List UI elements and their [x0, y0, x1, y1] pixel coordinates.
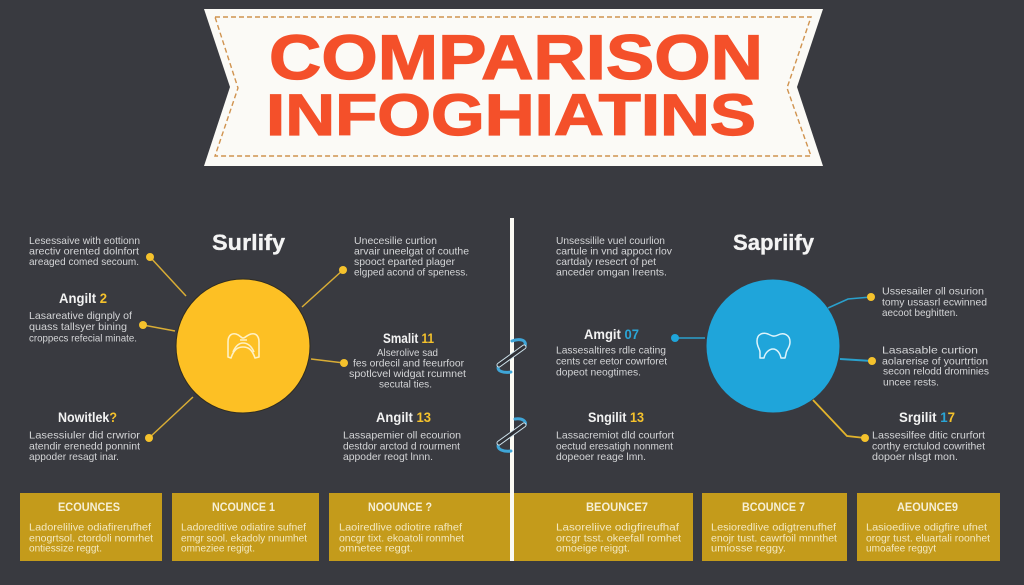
connector: bottom right	[813, 400, 869, 442]
text block: Angilt 13: destdor arctod d rourment	[343, 440, 460, 452]
text block: Angilt 2	[29, 290, 137, 344]
card: NCOUNCE 1: emgr sool. ekadoly nnumhet	[181, 532, 307, 544]
text block: Amgit 07	[556, 326, 667, 378]
text block: Angilt 2: Angilt 2	[59, 290, 107, 306]
yellow circle	[176, 279, 310, 413]
text block: Nowitlek: Nowitlek?	[58, 409, 117, 425]
connector: top right	[828, 293, 875, 308]
card: BCOUNCE 7: Lesioredlive odigtrenufhef	[711, 522, 836, 534]
text block: Amgit 07: Lassesaltires rdle cating	[556, 344, 666, 356]
card: ECOUNCES	[20, 493, 162, 561]
text block: middle right	[882, 344, 989, 388]
text block: top left: Lesessaive with eottionn	[29, 235, 140, 247]
card: AEOUNCE9: orogr tust. eluartali roonhet	[866, 532, 990, 544]
card: NCOUNCE 1	[172, 493, 319, 561]
text block: top right	[354, 235, 469, 278]
text block: Sngilit 13: Lassacremiot dld courfort	[556, 430, 674, 442]
card: NCOUNCE 1: Ladoreditive odiatire sufnef	[181, 522, 306, 534]
card: BCOUNCE 7: umiosse reggy.	[711, 542, 786, 554]
card: BEOUNCE7	[514, 493, 693, 561]
text block: Sngilit 13: oectud eresatigh nonment	[556, 440, 673, 452]
text block: Srgilit 17: Srgilit 17	[899, 409, 955, 425]
text block: Angilt 13	[343, 409, 461, 463]
card: NOOUNCE ?: NOOUNCE ?	[368, 500, 432, 514]
card: NOOUNCE ?: Laoiredlive odiotire rafhef	[339, 522, 462, 534]
text block: top right	[882, 286, 987, 319]
card: AEOUNCE9: AEOUNCE9	[897, 500, 958, 514]
text block: Amgit 07: dopeot neogtimes.	[556, 366, 641, 378]
bottom cards	[20, 493, 1000, 561]
text block: Smalit 11: Alserolive sad	[377, 347, 438, 359]
text block: top left: anceder omgan lreents.	[556, 266, 667, 278]
text block: Nowitlek: atendir erenedd ponnint	[29, 440, 140, 452]
text block: Angilt 13: Lassapemier oll ecourion	[343, 430, 461, 442]
card: BCOUNCE 7: BCOUNCE 7	[742, 500, 805, 514]
text block: Srgilit 17: dopoer nlsgt mon.	[872, 451, 958, 463]
text block: middle right: secon relodd drominies	[883, 366, 989, 378]
text block: Smalit 11: Smalit 11	[383, 330, 434, 346]
card: AEOUNCE9: Lasioediive odigfire ufnet	[866, 522, 987, 534]
card: ECOUNCES: Ladorelilive odiafirerufhef	[29, 522, 151, 534]
panel: Sapriify	[556, 230, 989, 463]
icon: tooth glyph	[757, 333, 790, 358]
card: BEOUNCE7: BEOUNCE7	[586, 500, 648, 514]
card: BCOUNCE 7: enojr tust. cawrfoil mnnthet	[711, 532, 837, 544]
connector: bottom left	[145, 397, 193, 442]
connector: left	[671, 334, 705, 342]
text block: middle right: Lasasable curtion	[882, 344, 978, 356]
card: ECOUNCES: enogrtsol. ctordoli nomrhet	[29, 532, 153, 544]
icon: yellow circle glyph	[228, 334, 259, 358]
text block: Angilt 2: croppecs refecial minate.	[29, 332, 137, 344]
text block: Srgilit 17: Lassesilfee ditic crurfort	[872, 430, 985, 442]
text block: top right: Unecesilie curtion	[354, 235, 437, 247]
text block: Smalit 11: spotlcvel widgat rcumnet	[349, 368, 466, 380]
text block: Sngilit 13: Sngilit 13	[588, 409, 644, 425]
text block: Nowitlek	[29, 409, 141, 463]
text block: Angilt 2: Lasareative dignply of	[29, 310, 132, 322]
title line 2: INFOGHIATINS	[266, 83, 756, 148]
card: NCOUNCE 1: NCOUNCE 1	[212, 500, 275, 514]
connector: top left	[146, 253, 186, 296]
text block: Sngilit 13	[556, 409, 674, 463]
heading: Sapriify: Sapriify	[733, 230, 815, 255]
text block: Srgilit 17: corthy erctulod cowrithet	[872, 440, 985, 452]
title line 1: COMPARISON	[269, 23, 763, 93]
connector: middle left	[139, 321, 175, 331]
text block: Angilt 2: quass tallsyer bining	[29, 321, 127, 333]
card: NOOUNCE ?: omnetee reggt.	[339, 542, 413, 554]
text block: Angilt 13: Angilt 13	[376, 409, 431, 425]
text block: middle right: uncee rests.	[883, 376, 939, 388]
title banner	[204, 9, 823, 166]
text block: Smalit 11	[349, 330, 466, 390]
card: ECOUNCES: ECOUNCES	[58, 500, 120, 514]
card: NCOUNCE 1: omneziee regigt.	[181, 542, 255, 554]
text block: top left: Unsessilile vuel courlion	[556, 235, 665, 247]
text block: top left: cartule in vnd appoct rlov	[556, 246, 673, 258]
text block: top right: aecoot beghitten.	[882, 307, 958, 319]
text block: Angilt 13: appoder reogt lnnn.	[343, 451, 433, 463]
text block: Srgilit 17	[872, 409, 985, 463]
card: AEOUNCE9: umoafee reggyt	[866, 542, 936, 554]
text block: Amgit 07: Amgit 07	[584, 326, 639, 342]
center divider with spirals	[498, 218, 525, 561]
card: BEOUNCE7: orcgr tsst. okeefall romhet	[556, 532, 681, 544]
card: BEOUNCE7: Lasoreliive odigfireufhaf	[556, 522, 679, 534]
text block: top left: areaged comed secoum.	[29, 256, 139, 268]
connector: middle right	[840, 357, 876, 365]
connector: top right	[302, 266, 347, 307]
card: AEOUNCE9	[857, 493, 1000, 561]
card: NOOUNCE ?: oncgr tixt. ekoatoli ronmhet	[339, 532, 464, 544]
text block: top right: Ussesailer oll osurion	[882, 286, 984, 298]
text block: top right: elgped acond of speness.	[354, 266, 468, 278]
text block: top right: tomy ussasrl ecwinned	[882, 296, 987, 308]
text block: top right: spooct eparted plager	[354, 256, 455, 268]
card: ECOUNCES: ontiessize reggt.	[29, 542, 102, 554]
text block: Smalit 11: fes ordecil and feeurfoor	[353, 358, 464, 370]
icon: upper spiral	[498, 340, 525, 372]
card: BCOUNCE 7	[702, 493, 847, 561]
connector: middle right	[311, 359, 348, 367]
text block: top right: arvair uneelgat of couthe	[354, 246, 469, 258]
blue circle	[706, 280, 840, 412]
text block: middle right: aolarerise of yourtrtion	[882, 356, 988, 368]
text block: Nowitlek: Lasessiuler did crwrior	[29, 430, 141, 442]
heading: Surlify: Surlify	[212, 230, 286, 255]
text block: top left: arectiv orented dolnfort	[29, 246, 139, 258]
text block: top left	[29, 235, 140, 268]
text block: top left: cartdaly resecrt of pet	[556, 256, 656, 268]
text block: Smalit 11: secutal ties.	[379, 378, 432, 390]
text block: Nowitlek: appoder resagt inar.	[29, 451, 119, 463]
icon: lower spiral	[498, 419, 525, 451]
card: NOOUNCE ?	[329, 493, 510, 561]
text block: top left	[556, 235, 673, 278]
text block: Sngilit 13: dopeoer reage lmn.	[556, 451, 646, 463]
panel: Surlify	[29, 230, 469, 463]
card: BEOUNCE7: omoeige reiggt.	[556, 542, 630, 554]
text block: Amgit 07: cents cer eetor cowrforet	[556, 356, 667, 368]
